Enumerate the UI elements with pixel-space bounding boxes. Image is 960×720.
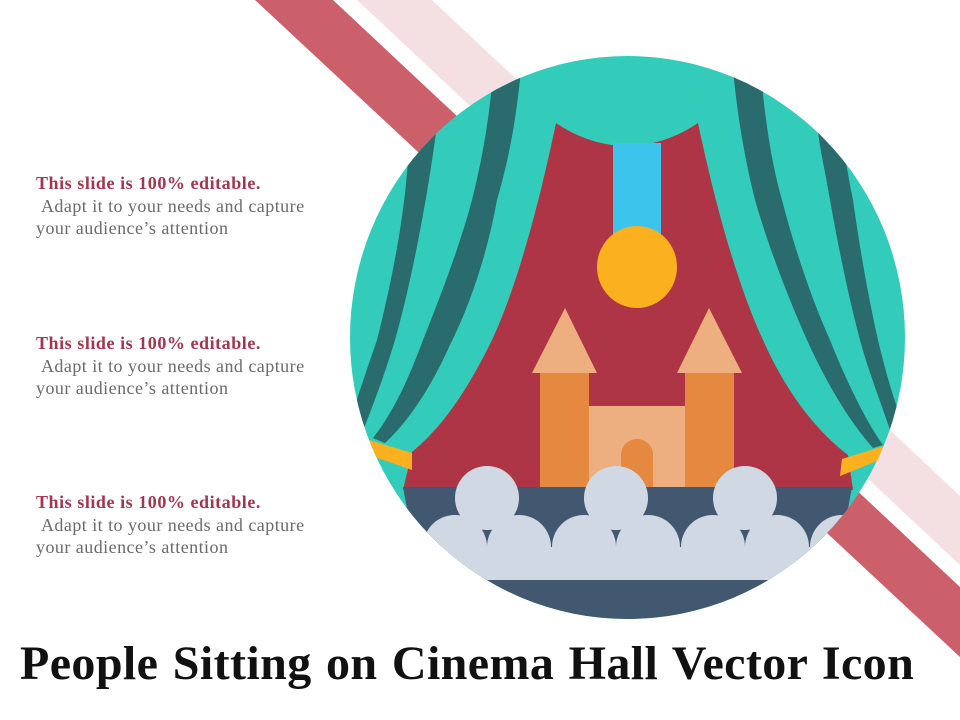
text block: note 1: This slide is 100% editable. <box>36 173 261 193</box>
text block: note 3: This slide is 100% editable. <box>36 492 261 512</box>
curtain tie: right <box>840 446 884 476</box>
curtain tie: left <box>366 439 412 470</box>
text block: note 1: Adapt it to your needs and capture <box>41 196 305 216</box>
stage floor <box>403 487 852 619</box>
stage backdrop <box>403 123 853 490</box>
diagonal ribbon: light pink <box>357 0 960 565</box>
title: People Sitting on Cinema Hall Vector Icon <box>20 637 914 690</box>
text block: note 3: Adapt it to your needs and capture <box>41 514 305 534</box>
curtain stripes: left <box>350 70 521 443</box>
graphic: diagonal ribbons and cinema stage icon <box>255 0 960 657</box>
text block: note 2 <box>36 333 305 398</box>
text block: note 1: your audience’s attention <box>36 218 228 238</box>
icon: cinema stage circle <box>340 50 920 630</box>
audience silhouettes <box>426 466 843 580</box>
text block: note 3 <box>36 492 305 557</box>
text block: note 2: Adapt it to your needs and capture <box>41 356 305 376</box>
sun lamp <box>597 226 677 308</box>
text block: note 2: your audience’s attention <box>36 378 228 398</box>
text block: note 3: your audience’s attention <box>36 537 228 557</box>
castle backdrop <box>532 308 742 488</box>
hanging screen strap <box>613 143 661 240</box>
curtain stripes: right <box>733 70 900 448</box>
text block: note 2: This slide is 100% editable. <box>36 333 261 353</box>
diagonal ribbon: red <box>255 0 960 657</box>
text block: note 1 <box>36 173 305 238</box>
